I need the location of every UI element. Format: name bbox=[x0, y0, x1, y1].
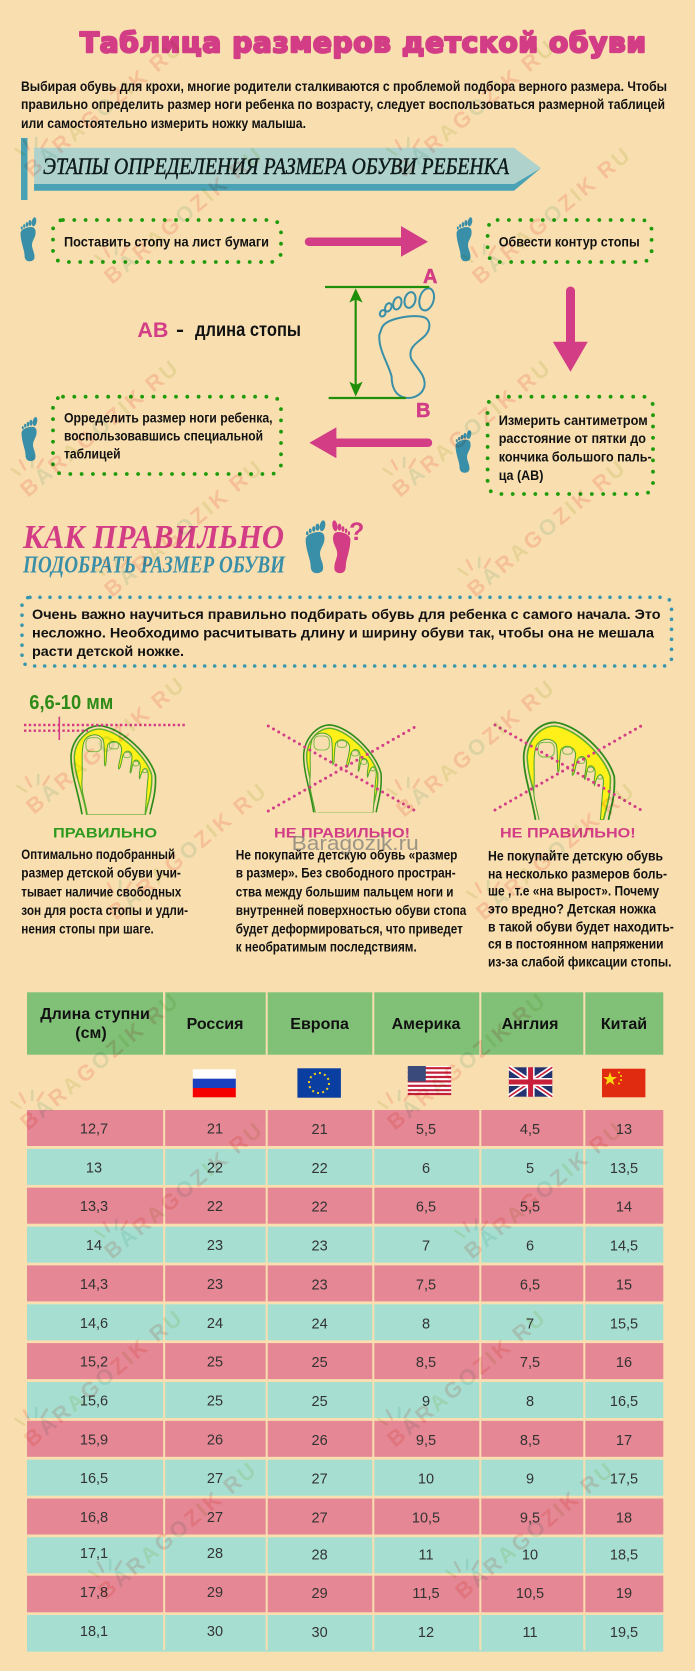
table header: Россия bbox=[187, 1016, 243, 1033]
row 17,1: 18,5 bbox=[610, 1548, 638, 1564]
row 14,6: 15,5 bbox=[610, 1316, 638, 1332]
watermark pattern: BARAGOZIK RU bbox=[99, 141, 268, 289]
row 15,9: 17 bbox=[616, 1433, 632, 1449]
row 15,6: 25 bbox=[207, 1394, 223, 1410]
label: AB length: AB bbox=[137, 319, 168, 342]
row 16,5: 9 bbox=[526, 1472, 534, 1488]
row 18,1: 19,5 bbox=[610, 1625, 638, 1641]
row 18,1: 12 bbox=[418, 1625, 434, 1641]
row 15,2: 15,2 bbox=[80, 1355, 108, 1371]
row 15,9 bbox=[27, 1421, 663, 1457]
diagram: correct fit: 6,6-10 мм bbox=[29, 692, 113, 714]
row 14,6: 24 bbox=[207, 1316, 223, 1332]
column 3: wrong, too big: ся в постоянном напряжении bbox=[488, 936, 664, 952]
row 18,1: 18,1 bbox=[80, 1624, 108, 1640]
row 14,6: 14,6 bbox=[80, 1316, 108, 1332]
flag: UK bbox=[509, 1067, 552, 1097]
row 15,2: 8,5 bbox=[416, 1355, 436, 1371]
icon: foot step 3 bbox=[22, 417, 38, 461]
row 16,8: 10,5 bbox=[412, 1510, 440, 1526]
row 15,9: 26 bbox=[312, 1433, 328, 1449]
title: Таблица размеров детской обуви bbox=[80, 26, 646, 59]
watermark pattern: BARAGOZIK RU bbox=[467, 141, 636, 289]
row 13: 22 bbox=[207, 1160, 223, 1176]
row 14,3: 15 bbox=[616, 1277, 632, 1293]
row 14 bbox=[27, 1227, 663, 1263]
table header: Англия bbox=[502, 1016, 558, 1033]
row 15,2: 16 bbox=[616, 1355, 632, 1371]
row 12,7: 4,5 bbox=[520, 1122, 540, 1138]
table body bbox=[27, 1110, 663, 1652]
row 12,7: 13 bbox=[616, 1122, 632, 1138]
icon: foot step 2 bbox=[456, 217, 473, 261]
icon: feet with question mark: ? bbox=[349, 518, 364, 546]
row 14: 23 bbox=[312, 1239, 328, 1255]
row 15,2: 7,5 bbox=[520, 1355, 540, 1371]
row 16,5 bbox=[27, 1460, 663, 1496]
watermark pattern: BARAGOZIK RU bbox=[19, 34, 188, 182]
row 17,8: 17,8 bbox=[80, 1585, 108, 1601]
step box 1 bbox=[53, 220, 281, 262]
row 17,8: 19 bbox=[616, 1586, 632, 1602]
watermark pattern: BARAGOZIK RU bbox=[99, 454, 268, 602]
row 16,5: 17,5 bbox=[610, 1472, 638, 1488]
watermark pattern: BARAGOZIK RU bbox=[93, 1456, 262, 1604]
step box 2 bbox=[488, 220, 652, 262]
row 17,1 bbox=[27, 1537, 663, 1573]
column 2: wrong, same size: будет деформироваться, что приведет bbox=[236, 920, 463, 936]
foot measure diagram bbox=[325, 266, 437, 422]
row 15,6: 15,6 bbox=[80, 1394, 108, 1410]
watermark pattern: BARAGOZIK RU bbox=[459, 1116, 628, 1264]
watermark pattern: BARAGOZIK RU bbox=[387, 354, 556, 502]
row 13,3: 5,5 bbox=[520, 1200, 540, 1216]
row 16,5: 27 bbox=[207, 1471, 223, 1487]
row 15,9: 8,5 bbox=[520, 1433, 540, 1449]
intro text bbox=[21, 78, 667, 131]
icon: feet with question mark bbox=[306, 518, 364, 573]
watermark pattern: BARAGOZIK RU bbox=[99, 1116, 268, 1264]
watermark pattern: BARAGOZIK RU bbox=[391, 674, 560, 822]
icon: foot step 4 bbox=[456, 430, 472, 473]
row 15,9: 15,9 bbox=[80, 1432, 108, 1448]
row 15,6 bbox=[27, 1382, 663, 1418]
step box 4: кончика большого паль- bbox=[499, 449, 652, 465]
row 16,8: 16,8 bbox=[80, 1510, 108, 1526]
arrow: right bbox=[305, 226, 428, 257]
heading: how to choose: КАК ПРАВИЛЬНО bbox=[22, 519, 284, 556]
row 15,9: 9,5 bbox=[416, 1433, 436, 1449]
row 17,8 bbox=[27, 1576, 663, 1612]
row 14,6 bbox=[27, 1304, 663, 1340]
row 13,3: 22 bbox=[312, 1200, 328, 1216]
column 2: wrong, same size: к необратимым последствиям. bbox=[236, 939, 417, 955]
diagram: wrong fit, too large bbox=[495, 722, 643, 823]
column 2: wrong, same size: НЕ ПРАВИЛЬНО! bbox=[274, 824, 410, 840]
row 13: 13 bbox=[86, 1160, 102, 1176]
row 15,6: 9 bbox=[422, 1394, 430, 1410]
step box 3: таблицей bbox=[64, 446, 121, 462]
row 15,9: 26 bbox=[207, 1432, 223, 1448]
row 17,1: 10 bbox=[522, 1548, 538, 1564]
intro text: или самостоятельно измерить ножку малыша. bbox=[21, 115, 306, 131]
column 3: wrong, too big: из-за слабой фиксации стопы. bbox=[488, 953, 672, 969]
column 2: wrong, same size: Не покупайте детскую обувь «размер bbox=[236, 847, 457, 863]
diagram: correct fit bbox=[24, 692, 185, 814]
table header: (см) bbox=[75, 1025, 107, 1042]
row 17,1: 28 bbox=[312, 1548, 328, 1564]
watermark pattern: BARAGOZIK RU bbox=[15, 354, 184, 502]
watermark pattern: BARAGOZIK RU bbox=[450, 1456, 619, 1604]
row 17,8: 29 bbox=[312, 1586, 328, 1602]
row 14: 14 bbox=[86, 1238, 102, 1254]
arrow: down bbox=[553, 286, 588, 372]
row 17,1: 28 bbox=[207, 1546, 223, 1562]
row 17,1: 17,1 bbox=[80, 1546, 108, 1562]
diagram: wrong fit, too small bbox=[268, 725, 417, 813]
row 18,1 bbox=[27, 1615, 663, 1652]
row 14: 7 bbox=[422, 1239, 430, 1255]
label: AB length: - bbox=[176, 320, 184, 341]
watermark pattern: BARAGOZIK RU bbox=[19, 1304, 188, 1452]
table header: Америка bbox=[392, 1016, 460, 1033]
section banner: steps: ЭТАПЫ ОПРЕДЕЛЕНИЯ РАЗМЕРА ОБУВИ РЕБЕНКА bbox=[43, 154, 510, 179]
column 1: correct: Оптимально подобранный bbox=[21, 846, 175, 862]
step box 4: ца (АВ) bbox=[499, 467, 543, 483]
flag: Russia bbox=[193, 1069, 236, 1097]
row 13: 13,5 bbox=[610, 1161, 638, 1177]
row 14,3: 14,3 bbox=[80, 1277, 108, 1293]
watermark pattern: BARAGOZIK RU bbox=[391, 34, 560, 182]
row 16,5: 16,5 bbox=[80, 1471, 108, 1487]
row 13 bbox=[27, 1149, 663, 1185]
row 18,1: 30 bbox=[207, 1624, 223, 1640]
column 2: wrong, same size bbox=[236, 824, 466, 955]
row 14,3: 23 bbox=[312, 1277, 328, 1293]
row 14: 14,5 bbox=[610, 1239, 638, 1255]
column 3: wrong, too big: это вредно? Детская ножка bbox=[488, 901, 656, 917]
row 13,3 bbox=[27, 1188, 663, 1224]
row 18,1: 11 bbox=[522, 1625, 538, 1641]
watermark pattern: BARAGOZIK RU bbox=[103, 777, 272, 925]
row 13: 22 bbox=[312, 1161, 328, 1177]
flag: EU bbox=[297, 1068, 341, 1098]
label: AB length bbox=[137, 319, 301, 342]
foot measure diagram: A bbox=[423, 266, 437, 288]
step box 4: расстояние от пятки до bbox=[499, 430, 646, 446]
step box 1: Поставить стопу на лист бумаги bbox=[64, 234, 269, 250]
row 13,3: 6,5 bbox=[416, 1200, 436, 1216]
section banner: steps bbox=[21, 138, 541, 200]
row 17,8: 11,5 bbox=[412, 1586, 440, 1602]
step box 2: Обвести контур стопы bbox=[499, 234, 640, 250]
row 16,8: 27 bbox=[207, 1510, 223, 1526]
watermark pattern: BARAGOZIK RU bbox=[462, 454, 631, 602]
step box 4: Измерить сантиметром bbox=[499, 412, 648, 428]
row 16,8: 27 bbox=[312, 1510, 328, 1526]
step box 3 bbox=[53, 397, 281, 474]
flag: China bbox=[602, 1069, 645, 1097]
column 1: correct bbox=[21, 824, 188, 936]
column 3: wrong, too big bbox=[488, 824, 674, 969]
row 12,7: 5,5 bbox=[416, 1122, 436, 1138]
icon: foot step 1 bbox=[20, 217, 37, 261]
row 15,6: 25 bbox=[312, 1394, 328, 1410]
row 14,3: 6,5 bbox=[520, 1277, 540, 1293]
row 14,3: 7,5 bbox=[416, 1277, 436, 1293]
callout: advice: Очень важно научиться правильно подбирать обувь для ребенка с самого начала. Это bbox=[32, 606, 660, 622]
column 1: correct: ПРАВИЛЬНО bbox=[53, 824, 157, 840]
row 14,6: 8 bbox=[422, 1316, 430, 1332]
column 1: correct: зон для роста стопы и удли- bbox=[21, 902, 188, 918]
arrow: left bbox=[309, 427, 432, 458]
step box 4 bbox=[488, 397, 653, 494]
row 12,7: 12,7 bbox=[80, 1122, 108, 1138]
column 1: correct: тывает наличие свободных bbox=[21, 883, 181, 899]
column 1: correct: нения стопы при шаге. bbox=[21, 920, 154, 936]
row 16,5: 27 bbox=[312, 1472, 328, 1488]
row 15,6: 16,5 bbox=[610, 1394, 638, 1410]
flag: USA bbox=[408, 1066, 451, 1095]
row 17,1: 11 bbox=[418, 1548, 434, 1564]
heading: how to choose bbox=[22, 519, 286, 579]
callout: advice bbox=[22, 597, 672, 666]
row 15,2: 25 bbox=[207, 1355, 223, 1371]
column 3: wrong, too big: Не покупайте детскую обувь bbox=[488, 847, 663, 863]
column 2: wrong, same size: в размер». Без свободного простран- bbox=[236, 865, 456, 881]
table header: Длина ступни bbox=[40, 1006, 150, 1023]
table header: Европа bbox=[290, 1016, 349, 1033]
row 15,2 bbox=[27, 1343, 663, 1379]
row 12,7: 21 bbox=[207, 1122, 223, 1138]
row 13: 5 bbox=[526, 1161, 534, 1177]
row 18,1: 30 bbox=[312, 1625, 328, 1641]
row 16,8: 18 bbox=[616, 1510, 632, 1526]
callout: advice: несложно. Необходимо расчитывать длину и ширину обуви так, чтобы она не мешала bbox=[32, 624, 654, 640]
row 12,7 bbox=[27, 1110, 663, 1146]
row 13,3: 14 bbox=[616, 1200, 632, 1216]
row 13,3: 13,3 bbox=[80, 1199, 108, 1215]
row 17,8: 29 bbox=[207, 1585, 223, 1601]
row 16,5: 10 bbox=[418, 1472, 434, 1488]
row 14: 23 bbox=[207, 1238, 223, 1254]
row 14,3 bbox=[27, 1265, 663, 1301]
row 15,6: 8 bbox=[526, 1394, 534, 1410]
row 14: 6 bbox=[526, 1239, 534, 1255]
watermark pattern: BARAGOZIK RU bbox=[15, 987, 184, 1135]
watermark pattern: BARAGOZIK RU bbox=[382, 987, 551, 1135]
heading: how to choose: ПОДОБРАТЬ РАЗМЕР ОБУВИ bbox=[22, 553, 286, 579]
row 16,8: 9,5 bbox=[520, 1510, 540, 1526]
column 2: wrong, same size: внутренней поверхностью обуви стопа bbox=[236, 902, 466, 918]
row 14,3: 23 bbox=[207, 1277, 223, 1293]
callout: advice: расти детской ножке. bbox=[32, 643, 184, 659]
foot measure diagram: B bbox=[416, 400, 430, 422]
row 13,3: 22 bbox=[207, 1199, 223, 1215]
row 15,2: 25 bbox=[312, 1355, 328, 1371]
step box 3: Орределить размер ноги ребенка, bbox=[64, 410, 273, 426]
column 3: wrong, too big: НЕ ПРАВИЛЬНО! bbox=[500, 824, 636, 840]
table header bbox=[27, 992, 663, 1055]
column 2: wrong, same size: ства между большим пальцем ноги и bbox=[236, 883, 454, 899]
step box 3: воспользовавшись специальной bbox=[64, 428, 263, 444]
column 3: wrong, too big: на несколько размеров боль- bbox=[488, 865, 667, 881]
watermark pattern: BARAGOZIK RU bbox=[382, 1304, 551, 1452]
row 12,7: 21 bbox=[312, 1122, 328, 1138]
watermark pattern: BARAGOZIK RU bbox=[21, 671, 190, 819]
row 14,6: 7 bbox=[526, 1316, 534, 1332]
site stamp: Baragozik.ru bbox=[292, 833, 419, 855]
column 3: wrong, too big: ше , т.е «на вырост». Почему bbox=[488, 883, 659, 899]
row 14,6: 24 bbox=[312, 1316, 328, 1332]
row 17,8: 10,5 bbox=[516, 1586, 544, 1602]
row 13: 6 bbox=[422, 1161, 430, 1177]
column 1: correct: размер детской обуви учи- bbox=[21, 865, 181, 881]
row 16,8 bbox=[27, 1498, 663, 1534]
label: AB length: длина стопы bbox=[195, 320, 301, 341]
table header: Китай bbox=[601, 1016, 647, 1033]
watermark pattern: BARAGOZIK RU bbox=[471, 777, 640, 925]
